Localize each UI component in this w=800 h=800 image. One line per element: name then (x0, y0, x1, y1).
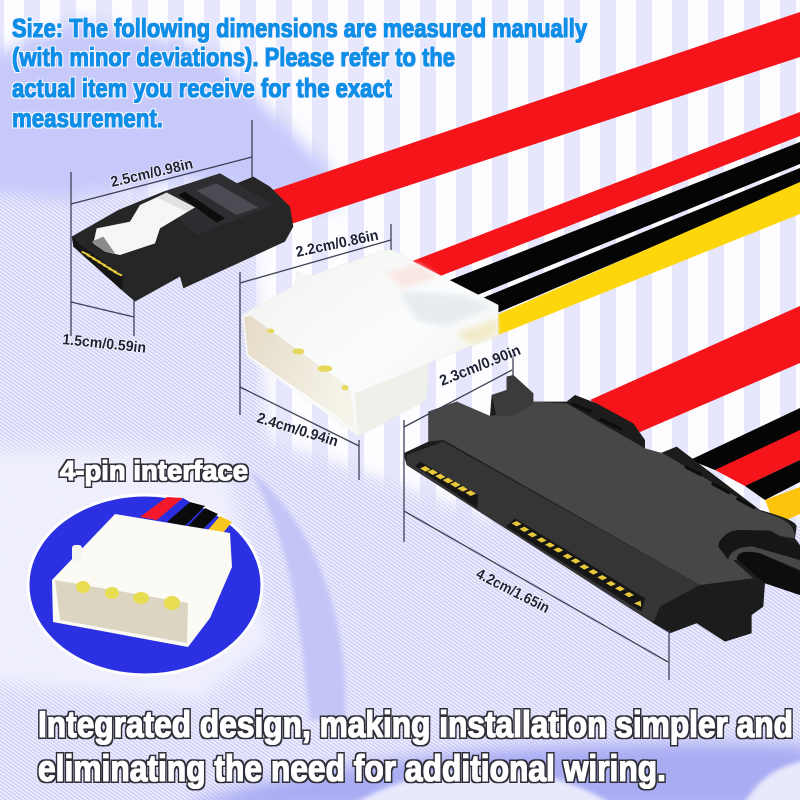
line 4: measurement. (12, 103, 163, 133)
clip crease (157, 193, 195, 212)
top description text (12, 13, 587, 133)
label: 2.5cm/0.98in: 2.5cm/0.98in (109, 155, 195, 191)
connector: large 4-pin (242, 248, 498, 437)
callout heading: 4-pin interface (60, 455, 248, 486)
wires (140, 497, 232, 533)
short pin row (420, 466, 476, 496)
window on latch (197, 183, 258, 215)
top of latch (163, 173, 273, 235)
pin: 3 (318, 365, 332, 372)
label: 4.2cm/1.65in: 4.2cm/1.65in (473, 565, 552, 617)
long pin row (512, 521, 641, 607)
tab (72, 545, 82, 561)
mounting slot (737, 552, 800, 595)
label: 2.3cm/0.90in: 2.3cm/0.90in (437, 342, 523, 390)
translucent panel (400, 292, 493, 327)
label: 2.4cm/0.94in: 2.4cm/0.94in (255, 410, 340, 450)
clip shadow (92, 237, 115, 253)
slot ring (718, 530, 800, 560)
front face (73, 237, 123, 290)
pin: 4 (342, 385, 348, 390)
band around slot (728, 547, 800, 570)
cables: power wires to 4-pin connector (410, 112, 800, 335)
yellow wire glow (457, 318, 498, 345)
small connector opening (55, 580, 188, 643)
label: 2.2cm/0.86in: 2.2cm/0.86in (294, 227, 380, 261)
cable: large red SATA data cable (270, 12, 800, 226)
side shading (355, 363, 428, 437)
label: 1.5cm/0.59in: 1.5cm/0.59in (62, 331, 147, 357)
connector: SATA 22-pin (403, 375, 800, 642)
dark slot for short pins (415, 462, 478, 508)
connector: 7-pin SATA data (72, 173, 293, 302)
metal clip (93, 193, 195, 255)
body (403, 375, 800, 642)
top face (428, 402, 795, 585)
blue ellipse (28, 495, 262, 675)
dark latch slot (178, 192, 225, 223)
dimension lines: SATA data connector (71, 120, 252, 336)
caption line 2: eliminating the need for additional wiring. (38, 748, 666, 789)
pin: 2 (292, 348, 304, 354)
callout: 4-pin interface (28, 455, 262, 675)
front opening (244, 316, 354, 428)
bottom caption (38, 704, 793, 789)
dark slot for long pins (506, 518, 645, 612)
line 1: Size: The following dimensions are measured manually (12, 13, 587, 43)
rear lugs (492, 375, 533, 417)
tint near red wire (387, 263, 438, 288)
line 3: actual item you receive for the exact (12, 73, 392, 103)
line 2: (with minor deviations). Please refer to the (12, 42, 455, 72)
lower ledge (407, 442, 700, 623)
gold pins (82, 252, 122, 276)
rear flange slots (572, 404, 755, 508)
pin: 1 (267, 329, 274, 333)
dimension lines: SATA power connector (404, 355, 669, 680)
cables: SATA power connector wires (590, 306, 800, 525)
pins (76, 581, 180, 610)
small connector body (52, 514, 232, 647)
dimension lines: 4-pin connector (240, 224, 391, 480)
